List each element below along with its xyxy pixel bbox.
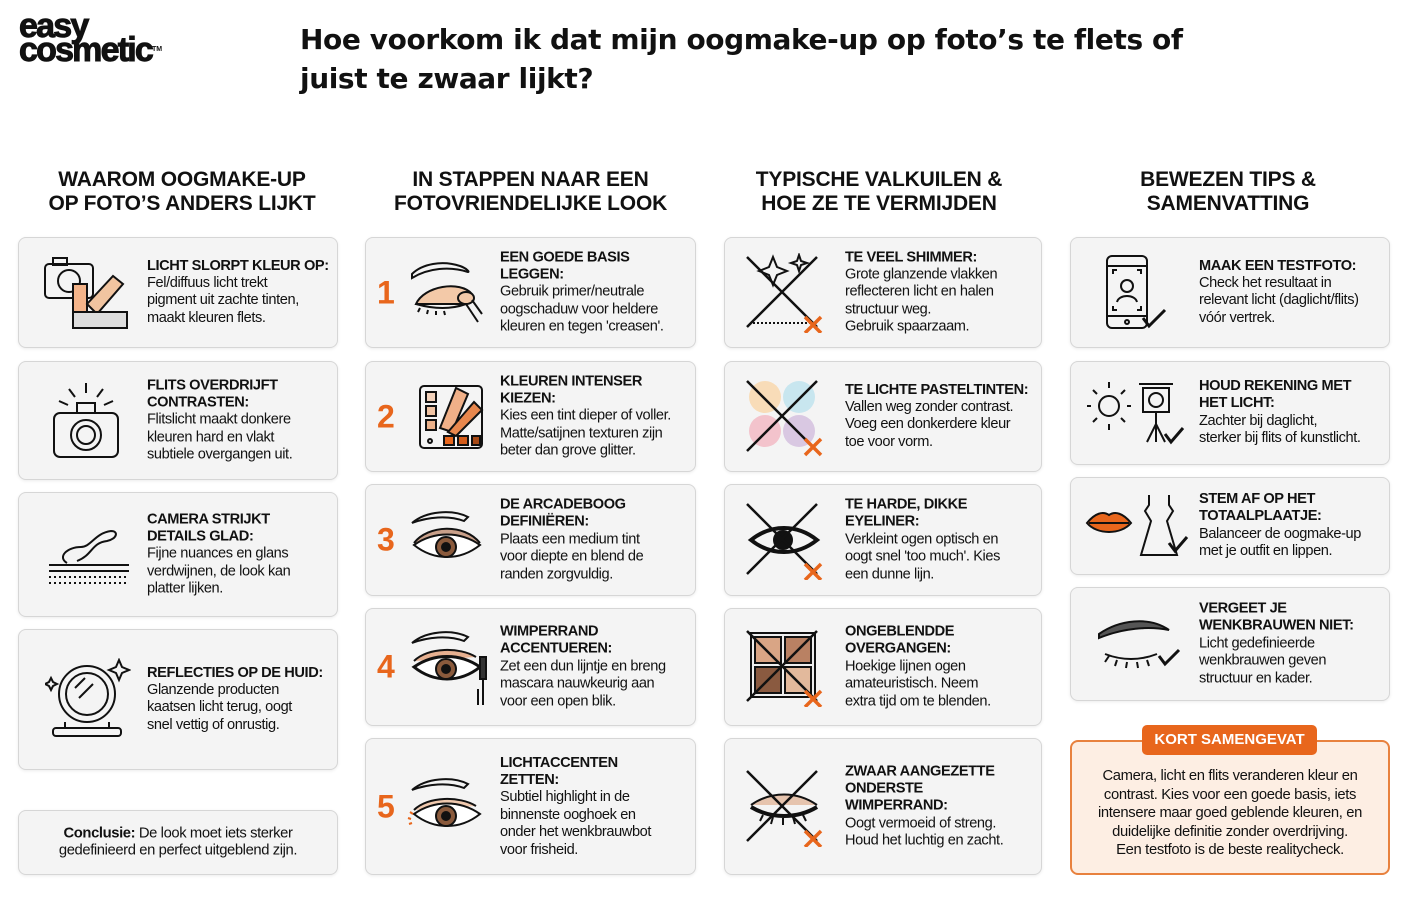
text: CAMERA STRIJKT [147, 511, 270, 527]
title: juist te zwaar lijkt? [300, 62, 593, 95]
panel: col1 card4 [18, 629, 338, 770]
text: WENKBRAUWEN NIET: [1199, 618, 1354, 634]
text: Licht gedefinieerde [1199, 635, 1315, 651]
icon: eye mascara [411, 631, 487, 705]
text: voor frisheid. [500, 841, 578, 857]
text: een dunne lijn. [845, 566, 934, 582]
text [1199, 378, 1361, 446]
heading: col3: TYPISCHE VALKUILEN & [756, 168, 1002, 191]
icon: shimmer crossed [746, 253, 822, 333]
text: HOUD REKENING MET [1199, 378, 1351, 394]
text: KIEZEN: [500, 390, 556, 406]
summary text [1072, 767, 1388, 860]
text: Glanzende producten [147, 682, 279, 698]
text: Plaats een medium tint [500, 531, 640, 547]
panel: conclusion [18, 810, 338, 875]
logo [19, 7, 162, 69]
panel: step2 [365, 361, 696, 472]
text: EEN GOEDE BASIS [500, 249, 629, 265]
panel: col1 card1 [18, 237, 338, 348]
text: ONDERSTE [845, 780, 923, 796]
summary text: Een testfoto is de beste realitycheck. [1116, 842, 1344, 858]
panel: pitfall4 [724, 608, 1042, 726]
heading: col3: HOE ZE TE VERMIJDEN [761, 192, 997, 215]
text: TE VEEL SHIMMER: [845, 249, 977, 265]
number: 5 [377, 788, 395, 824]
icon: brow and lashes [1095, 614, 1195, 674]
panel: step5 [365, 738, 696, 875]
panel: col1 card2 [18, 361, 338, 480]
text: platter lijken. [147, 581, 223, 597]
text: Oogt vermoeid of streng. [845, 815, 996, 831]
text: Gebruik spaarzaam. [845, 319, 969, 335]
text [845, 623, 991, 709]
text: WIMPERRAND: [845, 798, 948, 814]
text: structuur weg. [845, 301, 931, 317]
panel: summary [1070, 740, 1390, 875]
text [1199, 491, 1361, 559]
text: sterker bij flits of kunstlicht. [1199, 430, 1361, 446]
text [500, 249, 664, 335]
icon: lower lash crossed [746, 770, 822, 847]
text: KLEUREN INTENSER [500, 373, 642, 389]
text: FLITS OVERDRIJFT [147, 377, 278, 393]
text: oogt snel 'too much'. Kies [845, 549, 1000, 565]
logo: easy [19, 7, 87, 45]
logo: cosmeticTM [19, 31, 162, 69]
text: kleuren en tegen 'creasen'. [500, 319, 664, 335]
text: EYELINER: [845, 514, 919, 530]
heading: col4: BEWEZEN TIPS & [1140, 168, 1316, 191]
text: Houd het luchtig en zacht. [845, 833, 1003, 849]
text: HET LICHT: [1199, 396, 1274, 412]
panel: step4 [365, 608, 696, 726]
panel: pitfall2 [724, 361, 1042, 472]
icon: blocks crossed [746, 630, 822, 707]
text: pigment uit zachte tinten, [147, 292, 299, 308]
text [147, 258, 329, 326]
panel: pitfall1 [724, 237, 1042, 348]
summary text: Camera, licht en flits veranderen kleur en [1102, 768, 1358, 784]
panel: tip2 [1070, 361, 1390, 465]
text: TOTAALPLAATJE: [1199, 509, 1322, 525]
panel: tip4 [1070, 587, 1390, 701]
text [147, 665, 323, 733]
summary tag: KORT SAMENGEVAT [1154, 731, 1305, 748]
text: Fijne nuances en glans [147, 546, 288, 562]
title [299, 23, 1184, 95]
text: Vallen weg zonder contrast. [845, 399, 1013, 415]
panel: conclusion: gedefinieerd en perfect uitgeblend zijn. [59, 842, 297, 858]
icon: camera swatches [44, 257, 128, 329]
icon: eye highlight [408, 778, 482, 827]
text: ZETTEN: [500, 772, 559, 788]
icon: eye crease [411, 511, 482, 558]
icon: smoothed texture [49, 530, 129, 584]
icon: sun and lamp [1087, 382, 1184, 444]
text: amateuristisch. Neem [845, 676, 978, 692]
text: WIMPERRAND [500, 623, 598, 639]
heading: col4: SAMENVATTING [1147, 192, 1309, 215]
text: wenkbrauwen geven [1199, 653, 1326, 669]
text: subtiele overgangen uit. [147, 447, 292, 463]
icon: flash camera [53, 383, 119, 458]
icon: eye primer [411, 262, 483, 322]
heading: col1: WAAROM OOGMAKE-UP [58, 168, 306, 191]
text [500, 496, 644, 582]
text: Check het resultaat in [1199, 275, 1331, 291]
text: Zet een dun lijntje en breng [500, 658, 666, 674]
text: LICHTACCENTEN [500, 754, 618, 770]
summary text: intensere maar goed geblende kleuren, en [1098, 805, 1362, 821]
text: toe voor vorm. [845, 434, 933, 450]
text: Matte/satijnen texturen zijn [500, 425, 662, 441]
panel: tip1 [1070, 237, 1390, 348]
text [500, 754, 652, 857]
text [147, 377, 292, 463]
text: vóór vertrek. [1199, 310, 1275, 326]
text: OVERGANGEN: [845, 641, 951, 657]
text: ACCENTUEREN: [500, 641, 612, 657]
text: maakt kleuren flets. [147, 310, 266, 326]
panel: step3 [365, 484, 696, 596]
text: LICHT SLORPT KLEUR OP: [147, 258, 329, 274]
text: verdwijnen, de look kan [147, 563, 290, 579]
heading: col1 [48, 168, 316, 215]
text [1199, 258, 1359, 326]
heading: col2: IN STAPPEN NAAR EEN [412, 168, 649, 191]
text: voor diepte en blend de [500, 549, 643, 565]
number: 2 [377, 398, 395, 434]
number: 4 [377, 648, 395, 684]
text [845, 249, 997, 335]
text: ONGEBLENDDE [845, 623, 954, 639]
text: Gebruik primer/neutrale [500, 284, 644, 300]
summary text: contrast. Kies voor een goede basis, iets [1104, 786, 1356, 802]
text: Voeg een donkerdere kleur [845, 416, 1010, 432]
text: TE LICHTE PASTELTINTEN: [845, 382, 1028, 398]
icon: pastels crossed [746, 380, 822, 456]
text [1199, 600, 1354, 688]
text: onder het wenkbrauwbot [500, 824, 651, 840]
panel: tip3 [1070, 477, 1390, 575]
text: oogschaduw voor heldere [500, 301, 658, 317]
text: kleuren hard en vlakt [147, 429, 274, 445]
text: TE HARDE, DIKKE [845, 496, 967, 512]
icon: lips and dress [1086, 495, 1188, 556]
text: MAAK EEN TESTFOTO: [1199, 258, 1356, 274]
text [500, 623, 666, 709]
text: LEGGEN: [500, 266, 564, 282]
text: DE ARCADEBOOG [500, 496, 626, 512]
text: reflecteren licht en halen [845, 284, 994, 300]
text: CONTRASTEN: [147, 394, 249, 410]
summary text: duidelijke definitie zonder overdrijving. [1112, 824, 1348, 840]
icon: mirror [45, 658, 131, 737]
text: mascara nauwkeurig aan [500, 676, 654, 692]
text: beter dan grove glitter. [500, 443, 636, 459]
panel: col1 card3 [18, 492, 338, 617]
text: Grote glanzende vlakken [845, 266, 997, 282]
number: 1 [377, 274, 395, 310]
text: voor een open blik. [500, 693, 616, 709]
icon: phone check [1106, 255, 1166, 329]
text: relevant licht (daglicht/flits) [1199, 292, 1359, 308]
text: Balanceer de oogmake-up [1199, 526, 1361, 542]
panel: conclusion: Conclusie: De look moet iets sterker [64, 825, 292, 841]
heading: col3 [756, 168, 1002, 215]
panel: step1 [365, 237, 696, 348]
text: Fel/diffuus licht trekt [147, 275, 267, 291]
icon: palette [419, 385, 484, 449]
panel: pitfall3 [724, 484, 1042, 596]
text: Verkleint ogen optisch en [845, 531, 998, 547]
title: Hoe voorkom ik dat mijn oogmake-up op foto’s te flets of [300, 23, 1183, 56]
heading: col2 [394, 168, 667, 215]
text: snel vettig of onrustig. [147, 717, 279, 733]
text: Kies een tint dieper of voller. [500, 408, 671, 424]
text: kaatsen licht terug, oogt [147, 700, 292, 716]
text: REFLECTIES OP DE HUID: [147, 665, 323, 681]
text [845, 496, 1000, 582]
text [500, 373, 671, 459]
heading: col1: OP FOTO’S ANDERS LIJKT [48, 192, 316, 215]
text [845, 763, 1003, 849]
text: Subtiel highlight in de [500, 789, 630, 805]
text: DEFINIËREN: [500, 514, 589, 530]
text: ZWAAR AANGEZETTE [845, 763, 995, 779]
text: binnenste ooghoek en [500, 806, 636, 822]
summary tag [1142, 725, 1317, 755]
text: Hoekige lijnen ogen [845, 658, 966, 674]
text: Zachter bij daglicht, [1199, 413, 1317, 429]
heading: col4 [1140, 168, 1316, 215]
text [147, 511, 290, 597]
heading: col2: FOTOVRIENDELIJKE LOOK [394, 192, 667, 215]
text: Flitslicht maakt donkere [147, 412, 291, 428]
text [845, 382, 1028, 450]
icon: heavy liner crossed [746, 503, 822, 580]
panel: pitfall5 [724, 738, 1042, 875]
text: VERGEET JE [1199, 600, 1287, 616]
number: 3 [377, 522, 395, 558]
text: met je outfit en lippen. [1199, 543, 1332, 559]
text: randen zorgvuldig. [500, 566, 613, 582]
text: STEM AF OP HET [1199, 491, 1315, 507]
text: extra tijd om te blenden. [845, 693, 991, 709]
text: structuur en kader. [1199, 670, 1312, 686]
text: DETAILS GLAD: [147, 528, 253, 544]
